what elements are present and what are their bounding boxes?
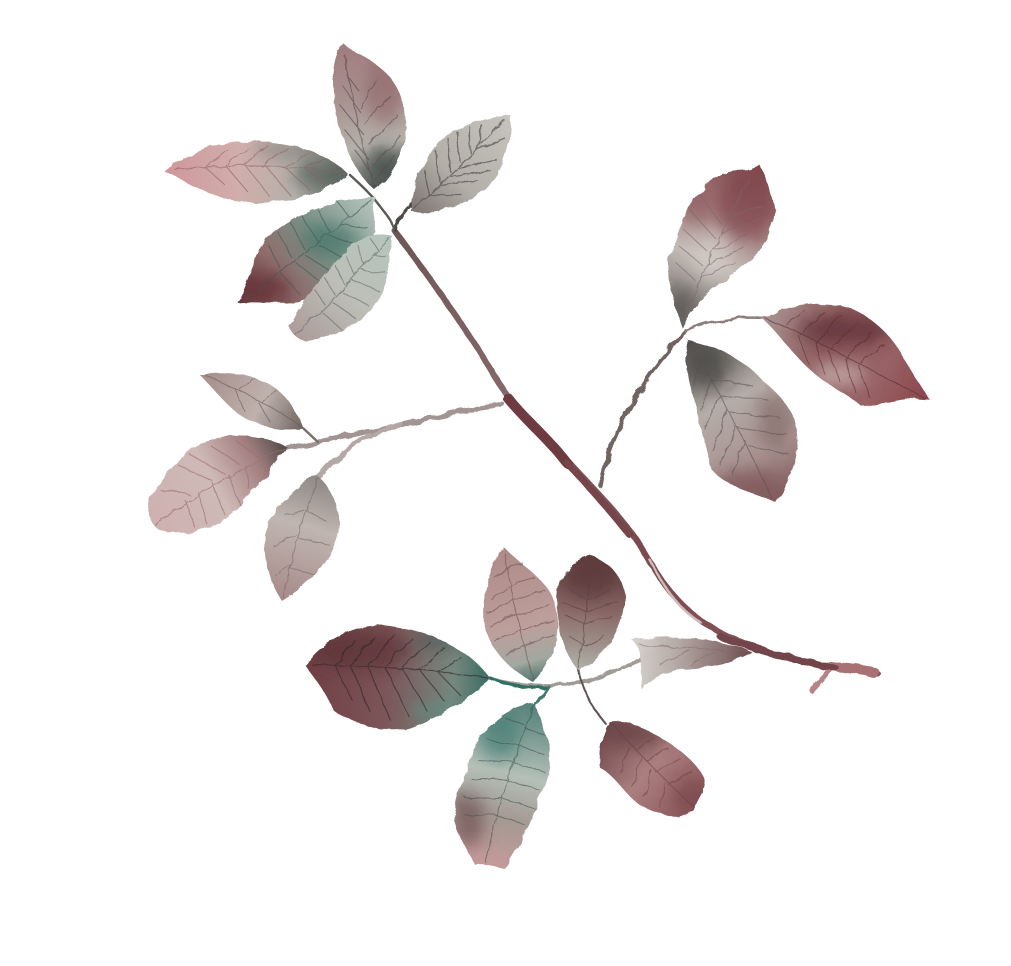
leaf: bottom brown spotted bbox=[557, 556, 624, 670]
leaf: middle pale bbox=[289, 235, 392, 341]
leaf: left lower bbox=[264, 476, 340, 601]
leaf: right top bbox=[668, 165, 775, 328]
leaf: middle dark to green bbox=[234, 197, 376, 304]
leaf: bottom upper pink bbox=[483, 546, 558, 682]
leaf: left middle bbox=[148, 436, 288, 533]
leaf: small pale near stem bbox=[632, 637, 752, 690]
leaf: bottom large dark bbox=[305, 625, 490, 730]
leaf: top bbox=[333, 45, 406, 190]
leaf: top left bbox=[165, 141, 348, 203]
branch: top cluster stems bbox=[350, 175, 414, 232]
illustration: watercolor branch bbox=[148, 44, 930, 869]
branch: left cluster stem bbox=[288, 405, 503, 476]
leaf: right lower bbox=[685, 340, 798, 502]
main stem bbox=[394, 230, 878, 690]
leaf: bottom right pink bbox=[599, 722, 708, 816]
leaf: top right bbox=[412, 115, 511, 213]
leaf: left top bbox=[199, 372, 303, 430]
branch: right cluster stem bbox=[601, 318, 765, 486]
branch: bottom cluster stems bbox=[490, 652, 660, 724]
leaf: bottom green bbox=[452, 704, 550, 868]
leaf: right bbox=[762, 304, 930, 405]
